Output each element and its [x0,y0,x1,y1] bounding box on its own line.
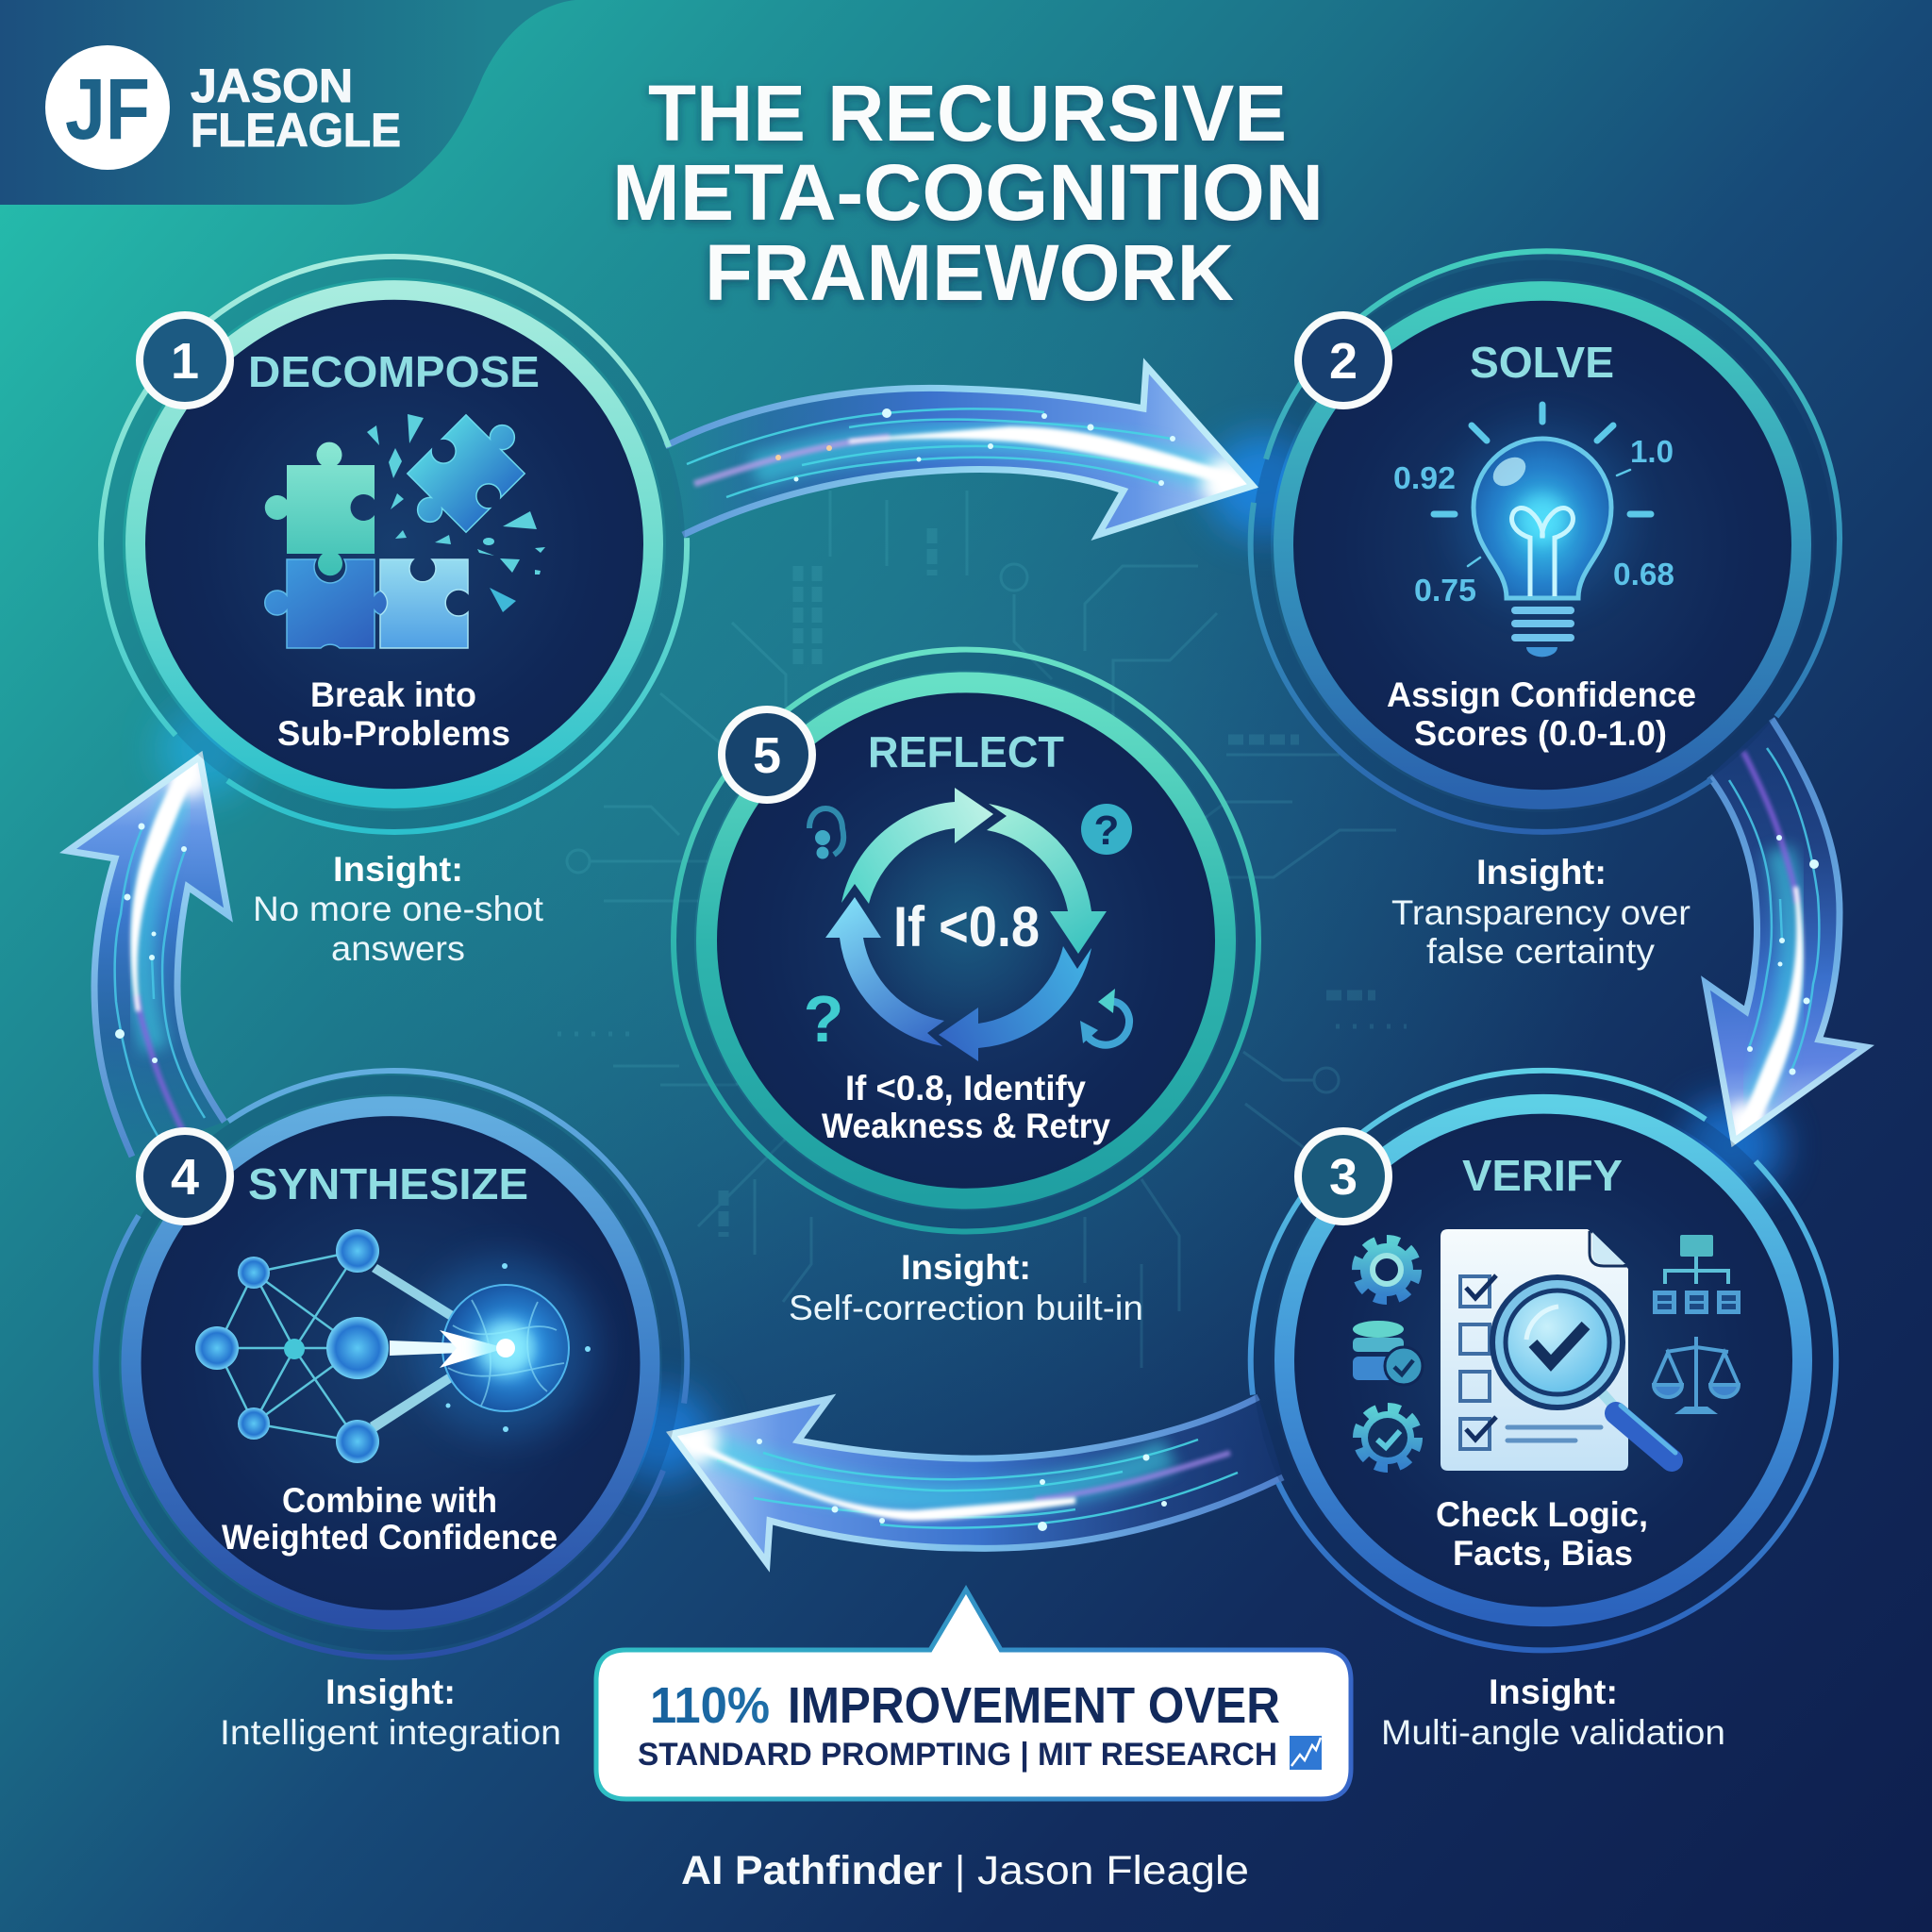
banner shape [0,0,575,205]
icon: light bulb with scores: 0.75 [1414,573,1476,608]
icon: light bulb with scores: 0.92 [1393,460,1456,495]
insight: step 2: Transparency over [1391,893,1690,932]
step 5 heading: REFLECT [868,727,1064,776]
title [612,69,1324,317]
footer [681,1848,1249,1893]
arrow: step 3 to step 4 [608,1387,1283,1563]
icon: question mark: ? [804,982,843,1056]
footer: AI Pathfinder [681,1848,942,1893]
step 5 number badge [722,709,812,800]
icon: light bulb with scores: 0.68 [1613,557,1674,591]
icon: org chart [1653,1235,1740,1314]
arrow: step 2 to step 3 [1679,719,1866,1193]
step 5 description: Weakness & Retry [822,1107,1110,1145]
step 5 description [822,1069,1110,1145]
icon: balance scale [1654,1337,1739,1414]
arrow: step 1 to step 2 [665,366,1321,538]
step 4 description [222,1481,558,1557]
step 4 description: Weighted Confidence [222,1518,558,1557]
insight: step 2 [1391,853,1690,971]
callout box with pointer [596,1590,1351,1799]
icon: undo arrow [1080,989,1129,1045]
insight: step 1: answers [331,929,465,968]
panel: step 4 synthesize [95,1071,687,1657]
step 4 heading: SYNTHESIZE [248,1159,528,1208]
arrow: step 4 to step 1 [68,703,253,1157]
footer: Jason Fleagle [977,1848,1249,1893]
callout subline: STANDARD PROMPTING | MIT RESEARCH [638,1737,1277,1773]
step 4 number badge [140,1131,230,1222]
insight: step 3 [1381,1673,1725,1752]
step 1 description: Break into [310,675,476,714]
icon: head outline [809,808,843,858]
panel: step 5 reflect [674,650,1258,1231]
icon: puzzle pieces [0,399,545,648]
icon: light bulb with scores: 1.0 [1630,434,1674,469]
step 2 number badge: 2 [1329,333,1357,390]
icon: light bulb with scores [1393,405,1674,657]
step 3 description [1436,1495,1648,1573]
step 2 description: Scores (0.0-1.0) [1414,714,1667,753]
logo wordmark: JASON [191,59,353,112]
step 2 description: Assign Confidence [1387,675,1696,714]
icon: neural network into globe [195,1229,595,1463]
step 2 heading: SOLVE [1470,338,1614,387]
insight: step 5: Self-correction built-in [789,1289,1143,1327]
icon: gear [1357,1241,1416,1299]
step 5 number badge: 5 [753,727,781,784]
logo banner [0,0,575,205]
insight: step 1 [253,850,544,968]
insight: step 1: Insight: [333,850,463,889]
step 4 description: Combine with [282,1481,497,1520]
step 1 number badge: 1 [171,333,199,390]
title: FRAMEWORK [705,228,1234,317]
callout headline: 110% [650,1677,770,1734]
icon: check gear [1358,1408,1417,1467]
step 2 description [1387,675,1696,753]
step 1 number badge [140,315,230,406]
title: THE RECURSIVE [648,69,1287,158]
icon: checklist document with magnifier [1441,1229,1675,1471]
step 3 heading: VERIFY [1462,1151,1623,1200]
insight: step 4 [220,1673,561,1752]
icon: growth chart [1290,1736,1322,1770]
insight: step 5 [789,1248,1143,1327]
insight: step 1: No more one-shot [253,890,544,928]
icon: question badge: ? [1094,808,1119,854]
step 3 description: Facts, Bias [1453,1534,1633,1573]
step 1 description: Sub-Problems [277,714,510,753]
logo badge: JF [45,45,170,170]
circuit board pattern [558,491,1407,1368]
step 3 description: Check Logic, [1436,1495,1648,1534]
step 3 number badge [1298,1131,1389,1222]
step 3 number badge: 3 [1329,1149,1357,1206]
logo wordmark: FLEAGLE [191,104,401,157]
insight: step 3: Multi-angle validation [1381,1713,1725,1752]
step 5 description: If <0.8, Identify [845,1069,1086,1108]
logo badge: JF: JF [65,61,150,158]
panel: step 2 solve [1251,251,1840,832]
panel: step 1 decompose [0,257,687,832]
logo wordmark [191,59,401,157]
icon: retry cycle arrows: If <0.8 [893,895,1040,958]
title: META-COGNITION [612,148,1324,237]
insight: step 5: Insight: [901,1248,1031,1287]
insight: step 4: Insight: [325,1673,456,1711]
callout headline: IMPROVEMENT OVER [788,1677,1280,1734]
insight: step 2: false certainty [1426,932,1656,971]
step 4 number badge: 4 [171,1149,199,1206]
step 1 heading: DECOMPOSE [248,347,540,396]
icon: question badge [1081,804,1132,855]
icon: database check [1353,1321,1423,1385]
step 1 description [277,675,510,753]
insight: step 4: Intelligent integration [220,1713,561,1752]
insight: step 3: Insight: [1489,1673,1618,1711]
panel: step 3 verify [1251,1071,1836,1650]
callout: 110% improvement [596,1590,1351,1799]
step 2 number badge [1298,315,1389,406]
icon: retry cycle arrows [825,788,1107,1061]
insight: step 2: Insight: [1476,853,1607,891]
footer: | [955,1848,965,1893]
